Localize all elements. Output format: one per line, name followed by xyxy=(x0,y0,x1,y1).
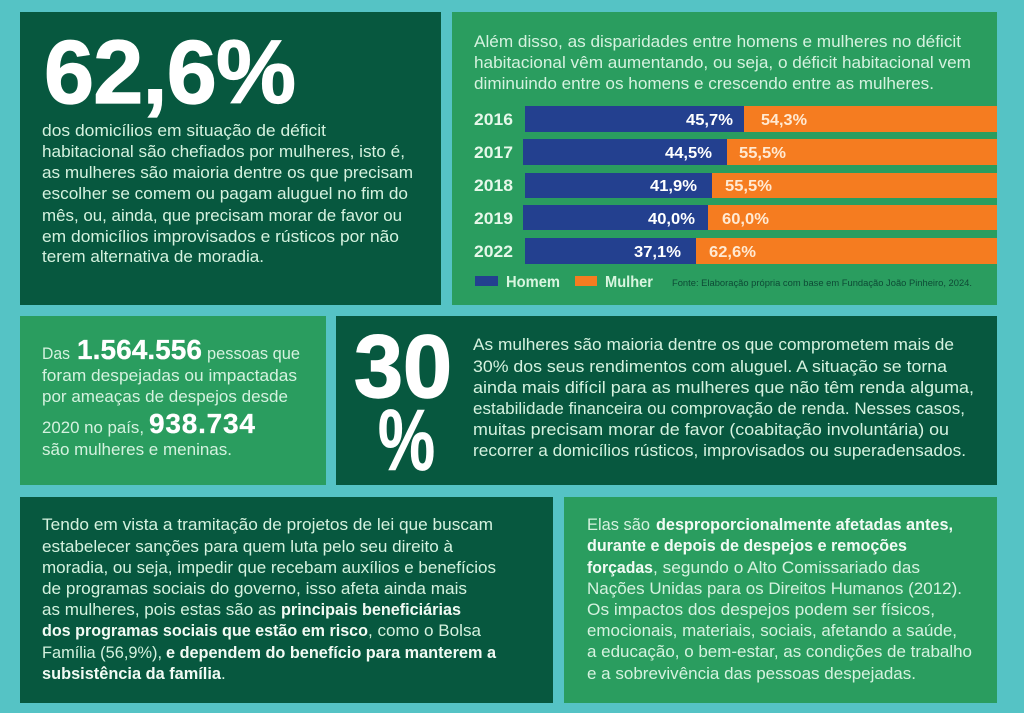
text block: disproportionate effects xyxy=(587,515,972,683)
text block: bills and social benefits: subsistência da família xyxy=(42,664,222,683)
text block: households headed by women xyxy=(42,121,413,266)
text block: disproportionate effects: emocionais, materiais, sociais, afetando a saúde, xyxy=(587,621,957,640)
text block: rent burden: estabilidade financeira ou comprovação de renda. Nesses casos, xyxy=(473,399,965,418)
text block: disproportionate effects: forçadas xyxy=(587,558,653,577)
bar row 2016: 2016 xyxy=(474,111,513,129)
legend: Homem xyxy=(506,274,560,291)
text block: disproportionate effects: Elas são xyxy=(587,515,650,534)
text block: rent burden: ainda mais difícil para as mulheres que não têm renda alguma, xyxy=(473,378,974,397)
text block: disproportionate effects: durante e depois de despejos e remoções xyxy=(587,536,907,555)
text block: bills and social benefits: , como o Bolsa xyxy=(368,621,482,640)
bar row 2016: 45,7% xyxy=(686,112,733,129)
text block: bills and social benefits xyxy=(42,515,497,683)
source note: Fonte: Elaboração própria com base em Fundação João Pinheiro, 2024. xyxy=(672,278,972,288)
text block: bills and social benefits: e dependem do benefício para manterem a xyxy=(166,643,497,662)
bar row 2019 xyxy=(474,205,997,230)
bar row 2018 xyxy=(474,173,997,198)
text block: bills and social benefits: . xyxy=(221,664,226,683)
panel: 62,6% statistic xyxy=(20,12,441,305)
text block: chart introduction: Além disso, as disparidades entre homens e mulheres no déficit xyxy=(474,32,961,51)
text block: bills and social benefits: as mulheres, pois estas são as xyxy=(42,600,276,619)
panel: chart of disparities xyxy=(452,12,997,305)
text block: rent burden xyxy=(473,335,974,460)
text block: disproportionate effects: Nações Unidas para os Direitos Humanos (2012). xyxy=(587,579,962,598)
legend: Mulher xyxy=(605,274,653,291)
bar row 2016: 54,3% xyxy=(761,112,807,129)
text block: chart introduction: habitacional vêm aumentando, ou seja, o déficit habitacional vem xyxy=(474,53,971,72)
bar row 2017 xyxy=(474,139,997,165)
bar row 2016 xyxy=(474,106,997,132)
text block: households headed by women: terem alternativa de moradia. xyxy=(42,247,264,266)
text block: rent burden: 30% dos seus rendimentos com aluguel. A situação se torna xyxy=(473,357,948,376)
text block: rent burden: As mulheres são maioria dentre os que comprometem mais de xyxy=(473,335,954,354)
panel: impacts of evictions xyxy=(564,497,997,703)
big percent sign: % xyxy=(378,393,435,489)
text block: households headed by women: as mulheres são maioria dentre os que precisam xyxy=(42,163,413,182)
text block: households headed by women: em domicílios improvisados e rústicos por não xyxy=(42,227,399,246)
text block: bills and social benefits: moradia, ou seja, impedir que recebam auxílios e benefícios xyxy=(42,558,496,577)
text block: rent burden: recorrer a domicílios rústicos, improvisados ou superadensados. xyxy=(473,441,966,460)
text block: chart introduction: diminuindo entre os homens e crescendo entre as mulheres. xyxy=(474,74,934,93)
text block: bills and social benefits: Tendo em vista a tramitação de projetos de lei que buscam xyxy=(42,515,493,534)
text block: disproportionate effects: Os impactos dos despejos podem ser físicos, xyxy=(587,600,935,619)
bar row 2018: 2018 xyxy=(474,177,513,195)
text block: people evicted: 1.564.556 xyxy=(77,334,202,365)
text block: households headed by women: mês, ou, ainda, que precisam morar de favor ou xyxy=(42,206,402,225)
bar row 2022: 37,1% xyxy=(634,244,681,261)
big number 30: 30 xyxy=(354,316,452,416)
bar row 2022: 2022 xyxy=(474,243,513,261)
text block: people evicted: são mulheres e meninas. xyxy=(42,440,232,459)
text block: people evicted: 2020 no país, xyxy=(42,418,144,437)
text block: rent burden: muitas precisam morar de favor (coabitação involuntária) ou xyxy=(473,420,949,439)
bar row 2017: 2017 xyxy=(474,144,513,162)
text block: households headed by women: habitacional são chefiados por mulheres, isto é, xyxy=(42,142,405,161)
bar row 2022 xyxy=(474,238,997,264)
bar row 2018: 41,9% xyxy=(650,178,697,195)
big number 62,6%: 62,6% xyxy=(44,23,296,123)
bar row 2019: 2019 xyxy=(474,210,513,228)
text block: people evicted: foram despejadas ou impactadas xyxy=(42,366,297,385)
text block: people evicted: Das xyxy=(42,344,70,363)
panel: evictions figures xyxy=(20,316,326,485)
text block: people evicted xyxy=(42,334,300,459)
text block: disproportionate effects: a educação, o bem-estar, as condições de trabalho xyxy=(587,642,972,661)
text block: disproportionate effects: , segundo o Alto Comissariado das xyxy=(653,558,920,577)
panel: social programs xyxy=(20,497,553,703)
text block: bills and social benefits: estabelecer sanções para quem luta pelo seu direito à xyxy=(42,537,454,556)
bar row 2018: 55,5% xyxy=(725,178,772,195)
text block: bills and social benefits: dos programas sociais que estão em risco xyxy=(42,621,368,640)
text block: bills and social benefits: de programas sociais do governo, isso afeta ainda mais xyxy=(42,579,467,598)
bar row 2017: 44,5% xyxy=(665,145,712,162)
bar row 2019: 40,0% xyxy=(648,211,695,228)
bar row 2017: 55,5% xyxy=(739,145,786,162)
text block: bills and social benefits: Família (56,9%), xyxy=(42,643,162,662)
panel: 30% statistic xyxy=(336,316,997,489)
bar row 2022: 62,6% xyxy=(709,244,756,261)
text block: households headed by women: dos domicílios em situação de déficit xyxy=(42,121,326,140)
text block: chart introduction xyxy=(474,32,971,93)
text block: people evicted: pessoas que xyxy=(207,344,300,363)
bar row 2019: 60,0% xyxy=(722,211,769,228)
text block: disproportionate effects: desproporcionalmente afetadas antes, xyxy=(656,515,953,534)
text block: people evicted: 938.734 xyxy=(149,408,255,439)
stacked bar chart xyxy=(474,106,997,264)
legend xyxy=(475,274,653,291)
text block: disproportionate effects: e a sobrevivência das pessoas despejadas. xyxy=(587,664,916,683)
text block: households headed by women: escolher se comem ou pagam aluguel no fim do xyxy=(42,184,408,203)
text block: bills and social benefits: principais beneficiárias xyxy=(281,600,461,619)
text block: people evicted: por ameaças de despejos desde xyxy=(42,387,288,406)
